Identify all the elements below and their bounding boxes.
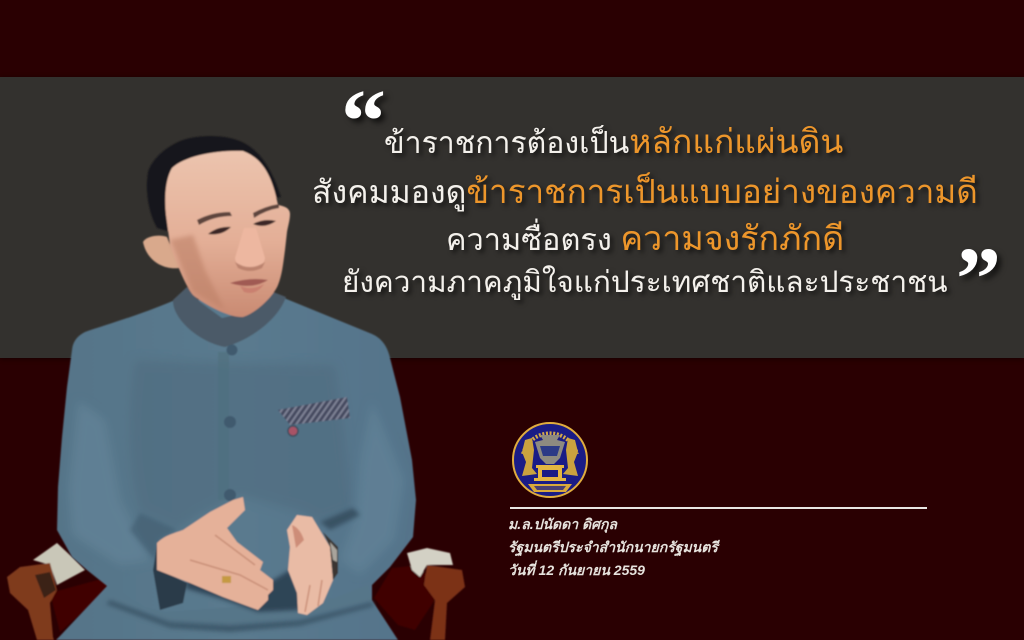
quote text block xyxy=(312,72,1002,329)
quote line 3: ความซื่อตรง ความจงรักภักดี xyxy=(446,220,844,258)
eyes xyxy=(208,220,276,234)
right sleeve highlight xyxy=(340,400,405,575)
pocket square xyxy=(278,397,350,425)
left chair carved arm xyxy=(7,563,57,640)
seal urn xyxy=(535,435,565,464)
right chair pad xyxy=(407,548,453,577)
seal guardian lions xyxy=(522,438,578,476)
quote line 4: ยังความภาคภูมิใจแก่ประเทศชาติและประชาชน xyxy=(342,266,948,299)
mouth xyxy=(230,279,268,286)
jacket hem band xyxy=(108,585,372,624)
quote line 2: สังคมมองดูข้าราชการเป็นแบบอย่างของความดี xyxy=(312,174,978,211)
left sleeve highlight xyxy=(68,400,150,565)
divider line xyxy=(510,507,927,509)
eyebrows xyxy=(197,204,279,225)
closing quotation mark: ” xyxy=(956,230,1001,329)
dark shadow below the hands xyxy=(185,570,320,612)
ring xyxy=(222,576,231,583)
chair xyxy=(7,543,465,640)
left hand xyxy=(157,497,273,610)
signature block xyxy=(508,516,720,578)
right chair carved arm xyxy=(424,565,465,640)
collar xyxy=(173,287,286,347)
seal lower ornament band xyxy=(528,484,572,492)
speaker name: ม.ล.ปนัดดา ดิศกุล xyxy=(508,516,617,532)
chair inner red panels xyxy=(50,578,108,632)
seal upper script ring xyxy=(523,433,577,454)
seal pedestal xyxy=(534,465,566,481)
opening quotation mark: “ xyxy=(341,72,386,171)
left chair pad xyxy=(33,543,85,585)
lapel pin xyxy=(288,426,298,436)
emblem: Thai government seal xyxy=(512,422,588,498)
figure xyxy=(56,136,416,640)
right sleeve upper edge xyxy=(320,508,360,530)
jacket and trousers silhouette xyxy=(56,298,416,640)
jacket placket xyxy=(218,352,229,500)
dark left cuff xyxy=(153,545,187,610)
date: วันที่ 12 กันยายน 2559 xyxy=(508,562,645,578)
left sleeve cuff edge xyxy=(130,513,177,560)
right hand xyxy=(287,515,333,615)
face xyxy=(165,151,290,317)
torso shading xyxy=(130,360,352,530)
wristwatch xyxy=(323,532,338,580)
panel: grey quote band xyxy=(0,77,1024,358)
shadow between jacket and trousers xyxy=(106,600,374,632)
quote line 1: ข้าราชการต้องเป็นหลักแก่แผ่นดิน xyxy=(384,124,843,161)
ear xyxy=(143,236,179,268)
speaker title: รัฐมนตรีประจำสำนักนายกรัฐมนตรี xyxy=(508,539,718,555)
jacket buttons xyxy=(224,344,238,501)
nose xyxy=(235,228,265,268)
cheek shading xyxy=(170,235,225,310)
hair xyxy=(147,136,281,232)
seal disc xyxy=(513,423,587,497)
